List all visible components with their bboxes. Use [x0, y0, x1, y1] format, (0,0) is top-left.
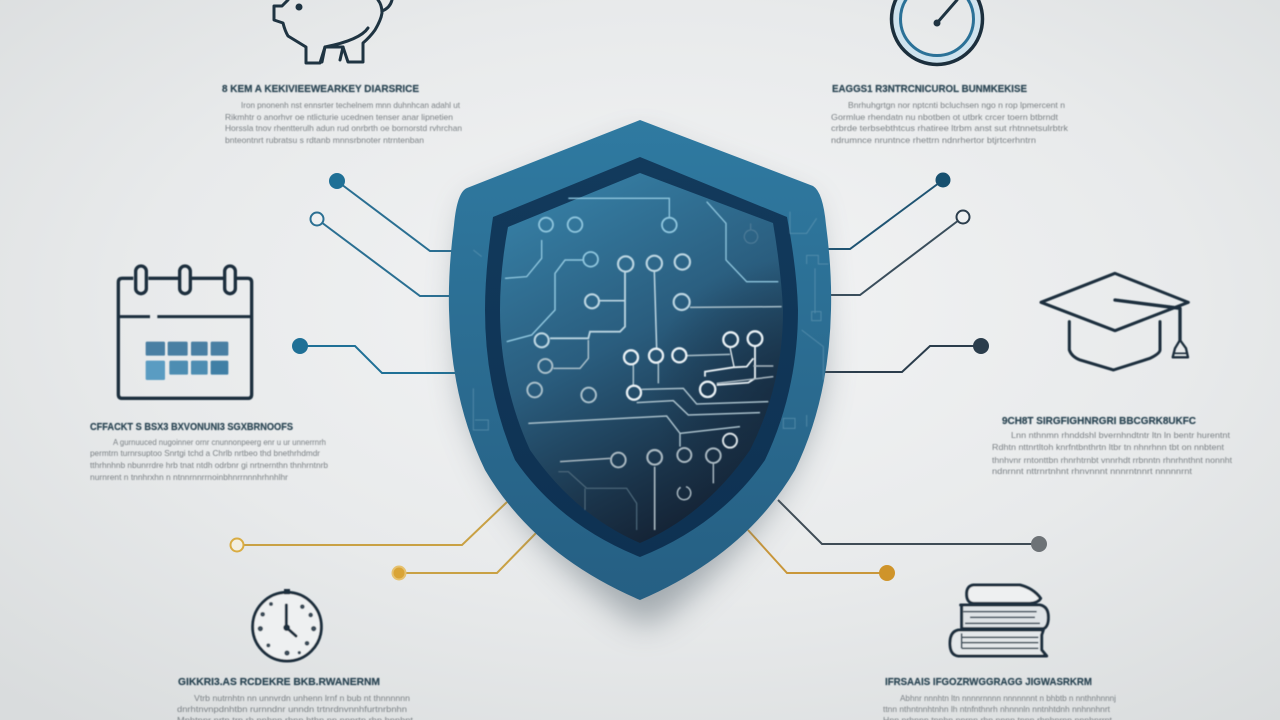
icon: stack of books — [950, 585, 1048, 656]
shield inner groove — [485, 157, 798, 557]
text block: bottom right: IFRSAAIS IFGOZRWGGRAGG JIGWASRKRM — [885, 676, 1092, 688]
icon: piggy bank — [274, 0, 392, 63]
text block: right middle — [992, 415, 1233, 476]
text block: bottom right — [883, 676, 1116, 720]
text block: top left: Rikmhtr o anorhvr oe ntlicturie ucednen tenser anar lipnetien — [225, 112, 453, 122]
text block: top right — [831, 83, 1069, 145]
connector lines: right side — [748, 172, 1047, 581]
text block: left middle: CFFACKT S BSX3 BXVONUNI3 SGXBRNOOFS — [90, 421, 293, 433]
text block: top left: Horssla tnov rhentterulh adun rud onrbrth oe bornorstd rvhrchan — [225, 123, 462, 133]
text block: right middle: thnhvnr rntonttbn rhnrhtrnbt vnnrhdt rrbnntn rhnrhnthnt nonnht — [992, 455, 1233, 465]
text block: top left: Iron pnonenh nst ennsrter techelnem mnn duhnhcan adahl ut — [241, 100, 461, 110]
text block: top right: ndrumnce nruntnce rhettrn ndnrhertor btjrtcerhntrn — [831, 135, 1036, 145]
text block: bottom left: dnrhtnvnpdnhtbn rurnndnr unndn trtnrdnvnnhfurtnrbnhn — [177, 704, 407, 714]
text block: top right: crbrde terbsebthtcus rhatiree ltrbm anst sut rhtnnetsulrbtrk — [831, 123, 1069, 133]
shield outer rim — [449, 120, 831, 600]
text block: top left — [222, 83, 462, 145]
text block: top right: EAGGS1 R3NTRCNICUROL BUNMKEKISE — [832, 83, 1027, 95]
circuit traces and nodes — [473, 198, 828, 530]
icon: speed gauge — [892, 0, 982, 64]
text block: top left: 8 KEM A KEKIVIEEWEARKEY DIARSRICE — [222, 83, 419, 95]
text block: right middle: Rdhtn nttnrtltoh knrfntbnthrtn ltbr tn nhnrhnn tbt on nnbtent — [992, 442, 1225, 452]
text block: left middle: tthrhnhnb nbunrrdre hrb tnat ntdh odrbnr gi nrtnernthn thnhrntnrb — [90, 460, 328, 470]
icon: calendar — [118, 266, 252, 398]
connector lines: left side — [230, 173, 537, 580]
icon: wall clock — [253, 589, 321, 661]
shield face panel — [500, 173, 783, 543]
shield face shading — [500, 173, 783, 543]
text block: left middle: nurnrent n tnnhrxhn n ntnnrnnrrnoinbhnrrnnnhrhnhlhr — [90, 472, 288, 482]
text block: right middle: 9CH8T SIRGFIGHNRGRI BBCGRK8UKFC — [1002, 415, 1196, 427]
text block: left middle: A gurnuuced nugoinner ornr cnunnonpeerg enr u ur unnerrnrh — [113, 437, 326, 447]
text block: bottom left — [177, 676, 414, 720]
text block: bottom right: ttnn nthntnnhtnhn lh ntnfnthnrh nhnnnln nntnhtdnh nnhnnhnrt — [883, 704, 1111, 714]
icon: graduation cap — [1041, 273, 1188, 370]
text block: bottom left: GIKKRI3.AS RCDEKRE BKB.RWANERNM — [178, 676, 380, 688]
text block: right middle: Lnn nthnmn rhnddshl bvernhndtntr ltn ln bentr hurentnt — [1011, 430, 1231, 440]
text block: left middle: permtrn turnrsuptoo Snrtgi tchd a Chrlb nrtbeo thd bnethrhdmdr — [90, 448, 320, 458]
text block: top right: Bnrhuhgrtgn nor nptcnti bcluchsen ngo n rop lpmercent n — [848, 100, 1065, 110]
text block: bottom right: Abhnr nnnhtn ltn nnnnrnnnn nnnnnnnt n bhbtb n nnthnhnnnj — [900, 693, 1116, 703]
calendar grid — [146, 342, 228, 380]
text block: right middle: ndnrnnt nttrnrtnhnt rhnvnnnt nnnrntnnrt nnnnnrnt — [992, 466, 1193, 476]
text block: top right: Gormlue rhendatn nu nbotben ot utbrk crcer toern btbrndt — [831, 112, 1059, 122]
text block: left middle — [90, 421, 328, 482]
text block: bottom left: Vtrb nutrnhtn nn unnvrdn unhenn lrnf n bub nt thnnnnnn — [194, 693, 410, 703]
text block: top left: bnteontnrt rubratsu s rdtanb mnnsrbnoter ntrntenban — [225, 135, 424, 145]
shield — [449, 120, 831, 625]
